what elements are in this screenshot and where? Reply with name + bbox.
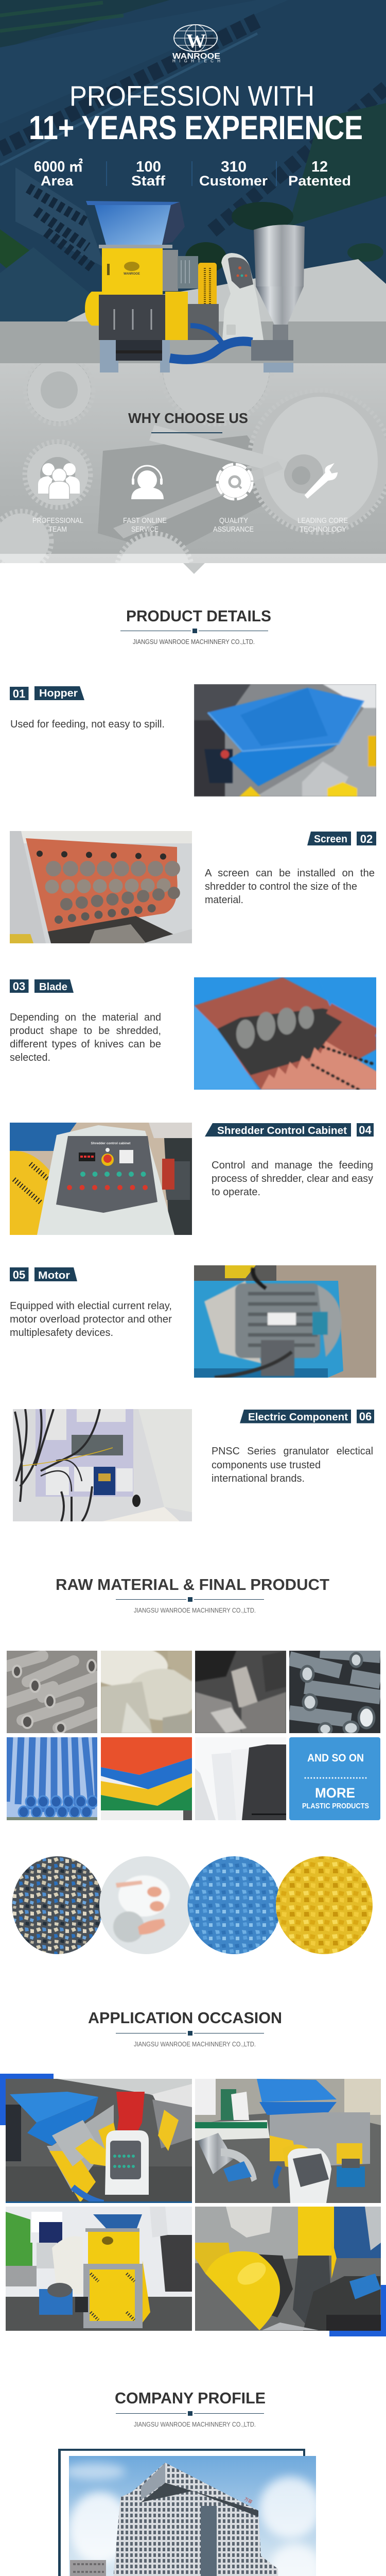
description: screen [205,868,375,906]
tag: 05 motor: 05 [13,1268,25,1281]
photo: yellow shredder, front [6,2207,192,2331]
heading: application occasion: JIANGSU WANROOE MACHINNERY CO.,LTD. [134,2041,256,2048]
tag: 01 hopper [10,686,84,700]
label: professional team: PROFESSIONAL [32,516,83,525]
tag: shredder control cabinet 04: 04 [359,1124,372,1137]
heading: company profile: COMPANY PROFILE [115,2389,266,2407]
logo: wanrooe hightech [172,25,220,63]
stat: patented: Patented [288,173,351,189]
stat: area [34,158,83,189]
stat: area: 6000 ㎡ [34,158,83,175]
headquarters image with frame [58,2449,321,2576]
photo: control cabinet: Shredder control cabinet [91,1142,131,1145]
machine frame, hose and legs [100,326,293,372]
tag: screen 02 [307,832,376,845]
icon: professional team [38,463,80,499]
photo: yellow shredder, side guard [195,2207,381,2331]
description: blade: Depending on the material and [10,1012,161,1023]
detail 06: electric component [10,1409,374,1521]
photo: office tower [69,2456,316,2576]
tag: electric component 06 [240,1410,374,1423]
tag: screen 02: Screen [314,834,347,845]
description: electric component [212,1446,373,1484]
heading: product details: JIANGSU WANROOE MACHINNERY CO.,LTD. [133,638,255,646]
description: blade [10,1012,161,1063]
tag: 03 blade [10,979,74,993]
stat: staff: Staff [131,173,166,189]
label: leading core technology: LEADING CORE [297,516,348,525]
tag: 03 blade: 03 [13,980,25,993]
description: control cabinet: to operate. [212,1187,260,1198]
panel: hero [0,0,386,372]
label: quality assurance: QUALITY [219,516,248,525]
label: professional team: TEAM [48,525,67,534]
description: control cabinet: process of shredder, clear and easy [212,1173,373,1184]
tile: and so on more plastic products: AND SO ON [307,1752,364,1764]
stat: staff: 100 [136,159,161,175]
machine steel cyclone [254,225,305,347]
down pointer triangle [183,563,205,574]
tag: 05 motor: Motor [38,1270,70,1281]
tag: 01 hopper: 01 [13,687,25,700]
heading: company profile [115,2389,266,2428]
description: control cabinet [212,1160,373,1198]
heading: product details: PRODUCT DETAILS [126,607,271,625]
detail 05: motor [10,1265,376,1378]
description: screen: shredder to control the size of the [205,881,357,892]
heading: raw material and final product [56,1575,329,1614]
hero background: factory aerial [0,0,386,363]
application photos [0,2074,386,2336]
tag: electric component 06: 06 [359,1410,372,1423]
photo: control cabinet [10,1123,192,1235]
circle: mixed granules [12,1856,103,1954]
description: motor: motor overload protector and other [10,1314,172,1325]
photo: shredder with control cabinet, angle two [195,2079,381,2203]
detail 01: hopper [10,684,376,796]
description: electric component: PNSC Series granulator electical [212,1446,373,1457]
circle: blue flakes [187,1856,281,1954]
tile: and so on more plastic products: MORE [315,1785,355,1801]
heading: raw material and final product: RAW MATERIAL & FINAL PRODUCT [56,1575,329,1594]
stat: area: Area [41,173,74,189]
final product circles [12,1856,373,1954]
photo: black scrap [195,1651,286,1733]
description: screen: A screen can be installed on the [205,868,375,879]
photo: office tower: 万容 [243,2496,253,2504]
tile: and so on more plastic products [289,1737,380,1820]
tile: and so on more plastic products: PLASTIC PRODUCTS [302,1802,369,1810]
description: electric component: international brands. [212,1473,305,1484]
icon: online service headset [131,466,164,499]
stat: customer: Customer [199,173,268,189]
heading: product details [120,607,271,646]
photo: grey pipes [7,1651,97,1733]
description: control cabinet: Control and manage the feeding [212,1160,373,1171]
description: electric component: components use trusted [212,1460,321,1471]
stat: staff [131,159,166,189]
label: fast online service: SERVICE [131,525,159,534]
machine body: WANROOE [124,273,140,276]
stat: patented [288,159,351,189]
label: fast online service [123,516,167,534]
circle: white flakes with fingers [99,1856,193,1954]
label: leading core technology [297,516,348,534]
tag: 03 blade: Blade [39,981,67,993]
description: blade: selected. [10,1052,50,1063]
photo: blue tubes [7,1737,97,1820]
panel: why choose us [0,313,386,610]
description: hopper: Used for feeding, not easy to spill. [10,719,165,730]
photo: screen [10,831,192,943]
tag: screen 02: 02 [360,833,373,845]
description: motor [10,1300,172,1338]
tag: shredder control cabinet 04 [205,1123,374,1137]
tag: 01 hopper: Hopper [39,688,78,699]
photo: shredder with control cabinet, angle one [6,2079,192,2203]
description: blade: different types of knives can be [10,1039,161,1050]
label: fast online service: FAST ONLINE [123,516,167,525]
detail 03: blade [10,977,381,1090]
heading: application occasion [88,2009,282,2048]
photo: motor [194,1265,376,1378]
heading: why choose us: WHY CHOOSE US [128,410,248,426]
logo: wanrooe hightech: WANROOE [172,52,220,61]
photo: white and black sheets [195,1744,286,1820]
machine body [85,248,219,340]
label: quality assurance [213,516,254,534]
photo: dark pipes [289,1651,380,1733]
photo: hopper [194,684,376,796]
headline [29,80,363,146]
label: quality assurance: ASSURANCE [213,525,254,534]
circle: yellow resin [276,1856,373,1954]
navy frame [58,2449,305,2576]
machine hopper [86,201,185,248]
description: blade: product shape to be shredded, [10,1025,161,1037]
logo: wanrooe hightech: W [186,30,206,52]
heading: application occasion: APPLICATION OCCASION [88,2009,282,2027]
label: leading core technology: TECHNOLOGY [300,525,346,534]
blue corner bottom right [329,2285,386,2336]
logo: wanrooe hightech: HIGHTECH [172,59,220,63]
material grid [7,1646,380,1820]
icon: wrench [305,464,337,498]
photo: coloured plastic sheets [101,1737,192,1820]
tag: 05 motor [10,1267,77,1281]
photo: film scrap [101,1651,192,1733]
description: screen: material. [205,894,243,906]
stat: patented: 12 [311,159,328,175]
gears background [0,363,386,563]
description: motor: multiplesafety devices. [10,1327,113,1338]
stat: customer [199,159,268,189]
headline: PROFESSION WITH [69,80,314,112]
photo: blade [194,977,376,1090]
machine control cabinet [221,253,264,340]
heading: raw material and final product: JIANGSU WANROOE MACHINNERY CO.,LTD. [134,1607,256,1614]
detail 04: control cabinet [10,1123,374,1235]
tag: electric component 06: Electric Component [248,1412,348,1423]
label: professional team [32,516,83,534]
shredder machine [85,201,305,372]
photo: electric component [13,1409,192,1521]
stat: customer: 310 [221,159,247,175]
blue corner top left [0,2074,54,2125]
tag: shredder control cabinet 04: Shredder Control Cabinet [217,1125,347,1137]
detail 02: screen [10,831,376,943]
heading: company profile: JIANGSU WANROOE MACHINNERY CO.,LTD. [134,2421,256,2428]
description: motor: Equipped with electial current relay, [10,1300,172,1312]
icon: quality gear [217,464,252,499]
